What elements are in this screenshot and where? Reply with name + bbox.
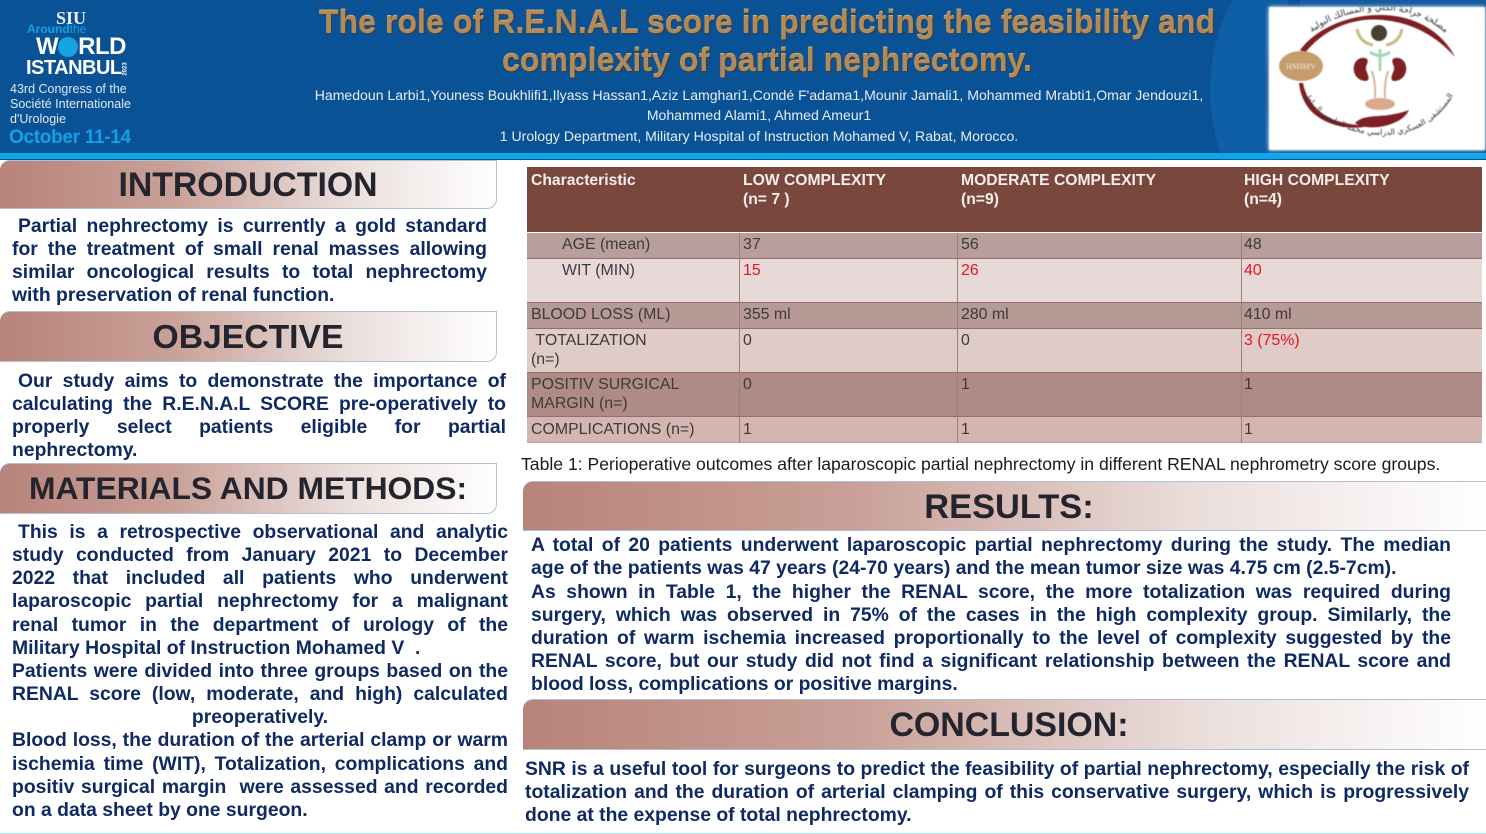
heading: objective: OBJECTIVE [153,318,343,356]
results table: 1 [961,421,970,438]
results table: (n= 7 ) [743,191,790,208]
text: materials and methods: 2022 that included all patients who underwent [12,567,508,589]
results table: 26 [961,262,979,279]
results table: (n=) [531,351,560,368]
text: introduction: with preservation of renal function. [12,284,334,306]
text: materials and methods: laparoscopic partial nephrectomy for a malignant [12,590,508,612]
text: objective: properly select patients eligible for partial [12,416,506,438]
hospital logo: المستشفى العسكري الدراسي محمد الخامس الرباط [1305,92,1454,138]
congress logo: 43rd Congress of the [10,82,127,96]
results table: TOTALIZATION [535,332,647,349]
text: objective: calculating the R.E.N.A.L SCORE pre-operatively to [12,393,506,415]
text: conclusion: done at the expense of total nephrectomy. [525,804,912,826]
title: The role of R.E.N.A.L score in predicting the feasibility and [319,4,1215,40]
table header row [527,167,1482,232]
text: materials and methods: Blood loss, the duration of the arterial clamp or warm [12,729,508,751]
results table: 48 [1244,236,1262,253]
results table: 1 [743,421,752,438]
text: materials and methods: on a data sheet by one surgeon. [12,799,308,821]
text: materials and methods: preoperatively. [192,706,328,728]
heading: materials and methods [0,463,497,514]
text: materials and methods: study conducted from January 2021 to December [12,544,508,566]
results table: WIT (MIN) [562,262,635,279]
text: results: blood loss, complications or positive margins. [531,673,958,695]
results table: MODERATE COMPLEXITY [961,172,1156,189]
authors: Hamedoun Larbi1,Youness Boukhlifi1,Ilyass Hassan1,Aziz Lamghari1,Condé F'adama1,Mounir Jamali1, Mohammed Mrabti1,Omar Jendouzi1, [315,87,1203,103]
results table: 37 [743,236,761,253]
results table: LOW COMPLEXITY [743,172,886,189]
congress logo: d'Urologie [10,112,66,126]
text: results: surgery, which was observed in 75% of the cases in the high complexity group. Similarly, the [531,604,1451,626]
text: materials and methods: ischemia time (WIT), Totalization, complications and [12,753,508,775]
authors line two: Mohammed Alami1, Ahmed Ameur1 [647,107,871,123]
decorative arc background [1210,0,1486,160]
text: materials and methods: Patients were divided into three groups based on the [12,660,508,682]
results table: 56 [961,236,979,253]
text: results: As shown in Table 1, the higher the RENAL score, the more totalization was required during [531,581,1451,603]
results table: POSITIV SURGICAL [531,376,679,393]
results table: 3 (75%) [1244,332,1300,349]
results table: (n=9) [961,191,999,208]
heading: introduction: INTRODUCTION [118,166,378,204]
congress logo: ISTANBUL [26,57,122,79]
congress logo: Société Internationale [10,97,131,111]
heading: materials and methods: MATERIALS AND METHODS: [29,470,467,506]
heading: results [523,481,1486,531]
text: results: duration of warm ischemia increased proportionally to the level of complexity suggested by the [531,627,1451,649]
hospital logo: HMIMV [1286,61,1317,71]
text: introduction: for the treatment of small renal masses allowing [12,238,487,260]
heading: conclusion: CONCLUSION: [889,706,1129,744]
results table: (n=4) [1244,191,1282,208]
results table: AGE (mean) [562,236,650,253]
text: materials and methods: RENAL score (low, moderate, and high) calculated [12,683,508,705]
title: complexity of partial nephrectomy. [502,42,1032,78]
text: conclusion: SNR is a useful tool for surgeons to predict the feasibility of partial nephrectomy, especially the risk of [525,758,1469,780]
heading: conclusion [523,699,1486,750]
results table: 40 [1244,262,1262,279]
text: materials and methods [12,521,508,821]
text: introduction: Partial nephrectomy is currently a gold standard [18,215,487,237]
results table [527,167,1482,443]
results table: 280 ml [961,306,1009,323]
congress logo: Aroundthe [27,22,86,36]
text: results: RENAL score, but our study did not find a significant relationship between the RENAL score and [531,650,1451,672]
results table: 0 [743,332,752,349]
text: materials and methods: positiv surgical margin were assessed and recorded [12,776,508,798]
results table: 1 [961,376,970,393]
results table: 0 [743,376,752,393]
text: results: age of the patients was 47 years (24-70 years) and the mean tumor size was 4.75 cm (2.5-7cm). [531,557,1396,579]
text: objective [12,370,506,461]
text: materials and methods: This is a retrospective observational and analytic [18,521,508,543]
results table: BLOOD LOSS (ML) [531,306,671,323]
heading: results: RESULTS: [924,488,1094,526]
results table: MARGIN (n=) [531,395,628,412]
text: conclusion [525,758,1469,826]
congress logo: SIU [56,8,86,28]
results table: 15 [743,262,761,279]
cyan stripe [0,153,1486,159]
header banner [0,0,1486,160]
results table: 1 [1244,421,1253,438]
affiliation: 1 Urology Department, Military Hospital of Instruction Mohamed V, Rabat, Morocco. [500,128,1018,144]
text: results: A total of 20 patients underwent laparoscopic partial nephrectomy during the study. The median [531,534,1451,556]
text: materials and methods: renal tumor in the department of urology of the [12,614,508,636]
results table: Characteristic [531,172,636,189]
congress logo: October 11-14 [9,127,131,148]
results table: 1 [1244,376,1253,393]
hospital logo [1269,7,1485,150]
table caption: Table 1: Perioperative outcomes after laparoscopic partial nephrectomy in different RENAL nephrometry score groups. [521,454,1440,474]
text: objective: Our study aims to demonstrate the importance of [18,370,506,392]
results table: COMPLICATIONS (n=) [531,421,694,438]
text: results [531,534,1451,695]
text: introduction [12,215,487,306]
results table: 410 ml [1244,306,1292,323]
heading: objective [0,311,497,362]
results table: HIGH COMPLEXITY [1244,172,1390,189]
text: materials and methods: Military Hospital of Instruction Mohamed V . [12,637,420,659]
results table: 355 ml [743,306,791,323]
congress logo: 2023 [123,62,129,76]
title [319,4,1215,79]
text: objective: nephrectomy. [12,439,137,461]
results table: 0 [961,332,970,349]
congress logo: W RLD [36,33,126,60]
heading: introduction [0,160,497,209]
text: introduction: similar oncological results to total nephrectomy [12,261,487,283]
congress logo [9,8,131,148]
text: conclusion: totalization and the duration of arterial clamping of this conservative surgery, which is progressively [525,781,1469,803]
